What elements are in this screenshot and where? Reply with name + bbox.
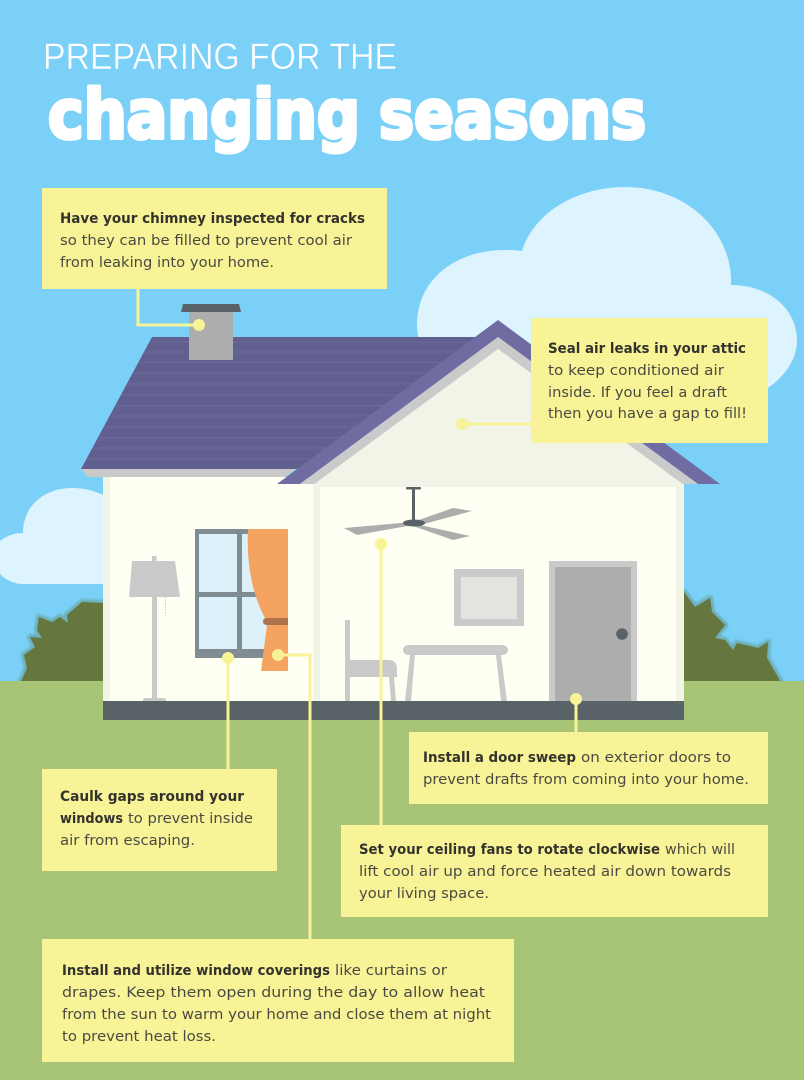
title line: changing seasons: [48, 76, 646, 155]
gable: grey trim and face: [300, 337, 698, 484]
bush: right: [683, 592, 782, 684]
callout: window coverings: Install and utilize window coverings: [62, 963, 330, 979]
callout: caulk windows: to prevent inside: [128, 811, 253, 827]
ground: grass: [0, 681, 804, 1080]
callout: chimney: from leaking into your home.: [60, 255, 274, 271]
floor lamp: [129, 556, 180, 701]
callout: window coverings: to prevent heat loss.: [62, 1029, 216, 1045]
callout: attic: then you have a gap to fill!: [548, 406, 747, 422]
callout: attic: Seal air leaks in your attic: [548, 341, 746, 357]
callout: door sweep: on exterior doors to: [581, 750, 731, 766]
title line: preparing for the: PREPARING FOR THE: [43, 36, 397, 77]
callout: attic: to keep conditioned air: [548, 363, 724, 379]
callout: chimney: so they can be filled to prevent cool air: [60, 233, 352, 249]
chair: [345, 620, 397, 701]
connector: window caulk: [222, 652, 234, 769]
connector: ceiling fan: [375, 538, 387, 826]
title line: changing seasons: seasons: [379, 76, 646, 155]
callout: door sweep: Install a door sweep: [423, 750, 576, 766]
connector: attic: [456, 418, 532, 430]
callout: caulk windows: air from escaping.: [60, 833, 195, 849]
callout: ceiling fans: [341, 825, 768, 917]
callout: ceiling fans: which will: [665, 842, 735, 858]
callout: window coverings: drapes. Keep them open during the day to allow heat: [62, 985, 485, 1001]
callout: caulk windows: [42, 769, 277, 871]
wall: left room: [110, 477, 313, 701]
cloud: small left: [0, 488, 103, 584]
foundation: [103, 701, 684, 720]
callout: ceiling fans: lift cool air up and force heated air down towards: [359, 864, 731, 880]
callout: window coverings: [42, 939, 514, 1062]
wall picture: [454, 569, 524, 626]
callout: caulk windows: Caulk gaps around your: [60, 789, 245, 805]
connector: door sweep: [570, 693, 582, 733]
door: [549, 561, 637, 701]
house: [80, 320, 720, 720]
callout: door sweep: [409, 732, 768, 804]
title line: changing seasons: changing: [48, 76, 360, 155]
wall: right room: [320, 487, 676, 701]
roof: main slope: [80, 337, 500, 477]
callout: door sweep: prevent drafts from coming into your home.: [423, 772, 749, 788]
callout: chimney: [42, 188, 387, 289]
curtain: [248, 529, 288, 671]
callout: caulk windows: windows: [60, 811, 123, 827]
callout: ceiling fans: your living space.: [359, 886, 489, 902]
ceiling fan: [344, 487, 472, 540]
cloud: large right: [417, 187, 797, 430]
table: [403, 645, 508, 701]
bush: left: [20, 602, 104, 684]
callout: window coverings: like curtains or: [335, 963, 447, 979]
connector: chimney: [138, 289, 205, 331]
callout: attic: [531, 318, 768, 443]
wall: walls and trim: [103, 477, 684, 701]
callout: attic: inside. If you feel a draft: [548, 385, 727, 401]
connector: window coverings: [272, 649, 310, 940]
title: [43, 36, 646, 155]
window: [195, 529, 270, 658]
gable: purple rake: [277, 320, 720, 484]
callout: window coverings: from the sun to warm your home and close them at night: [62, 1007, 491, 1023]
chimney: [181, 304, 241, 360]
callout: ceiling fans: Set your ceiling fans to rotate clockwise: [359, 842, 660, 858]
callout: chimney: Have your chimney inspected for cracks: [60, 211, 365, 227]
